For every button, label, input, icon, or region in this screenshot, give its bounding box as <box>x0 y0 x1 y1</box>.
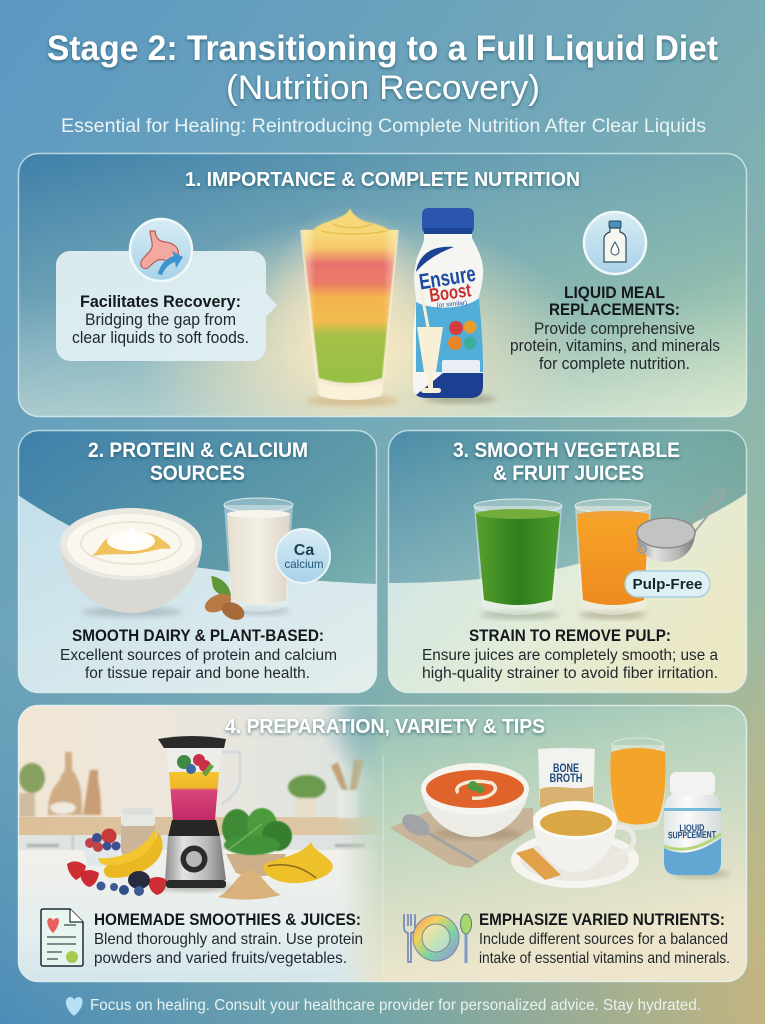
title: Stage 2: Transitioning to a Full Liquid Diet <box>47 29 718 68</box>
smooth dairy text <box>60 627 337 682</box>
subtitle: Essential for Healing: Reintroducing Complete Nutrition After Clear Liquids <box>61 116 706 137</box>
panel 3 heading: & FRUIT JUICES <box>493 462 644 485</box>
strain text: STRAIN TO REMOVE PULP: <box>469 627 671 645</box>
callout: facilitates recovery: Bridging the gap from <box>85 311 236 329</box>
bone broth packet <box>538 748 595 807</box>
liquid meal replacements text: Provide comprehensive <box>534 320 695 338</box>
panel 3: smooth vegetable and fruit juices <box>388 430 747 693</box>
panel 1 heading: 1. IMPORTANCE & COMPLETE NUTRITION <box>185 168 580 191</box>
teacup and saucer <box>511 801 639 888</box>
almonds and leaf <box>202 576 247 623</box>
layered smoothie glass <box>300 208 399 406</box>
smoothies text <box>94 910 363 967</box>
nutrients text <box>479 910 730 967</box>
footer note: Focus on healing. Consult your healthcare provider for personalized advice. Stay hydrated. <box>90 997 701 1014</box>
strawberries and blueberries <box>67 861 167 896</box>
strain text: Ensure juices are completely smooth; use a <box>422 647 718 664</box>
orange juice glass <box>575 499 651 619</box>
jar of protein drink <box>121 808 155 856</box>
napkin and spoon <box>390 808 533 868</box>
smooth dairy text: Excellent sources of protein and calcium <box>60 647 337 664</box>
nutrients text: EMPHASIZE VARIED NUTRIENTS: <box>479 910 725 929</box>
liquid meal replacements text: REPLACEMENTS: <box>549 300 680 319</box>
bananas <box>98 830 163 878</box>
icon: supplement bottle <box>584 212 646 274</box>
icon: heart <box>66 997 83 1016</box>
product label text: Ensure <box>417 261 477 294</box>
banana pieces <box>263 842 333 883</box>
callout: facilitates recovery: clear liquids to soft foods. <box>72 329 249 347</box>
callout: facilitates recovery: Facilitates Recovery: <box>80 292 241 311</box>
panel 2 heading <box>88 439 308 485</box>
title: (Nutrition Recovery) <box>226 69 540 107</box>
blender <box>158 736 240 891</box>
divider <box>382 755 384 975</box>
strain text: high-quality strainer to avoid fiber irritation. <box>422 665 718 682</box>
spinach bowl <box>222 808 292 876</box>
pulp-free pill: Pulp-Free <box>632 576 702 593</box>
nutrients text: intake of essential vitamins and minerals. <box>479 950 730 967</box>
bone broth packet: BROTH <box>550 771 582 785</box>
icon: stomach <box>130 219 192 281</box>
strainer <box>637 490 724 562</box>
bone broth packet: BONE <box>553 761 579 775</box>
smoothies text: HOMEMADE SMOOTHIES & JUICES: <box>94 910 361 929</box>
calcium badge: calcium <box>284 557 324 571</box>
product label text <box>417 261 477 309</box>
protein powder mound <box>218 870 281 900</box>
icon: health document <box>41 909 83 966</box>
panel 4 heading: 4. PREPARATION, VARIETY & TIPS <box>225 715 545 738</box>
green juice glass <box>474 499 562 619</box>
icon: rainbow plate and cutlery <box>404 914 472 963</box>
panel 3 heading: 3. SMOOTH VEGETABLE <box>453 439 680 462</box>
strain text <box>422 627 718 682</box>
product label text: (or similar) <box>436 300 467 309</box>
liquid meal replacements text: for complete nutrition. <box>539 355 690 373</box>
panel 4: preparation, variety and tips <box>18 704 748 982</box>
callout: facilitates recovery <box>56 251 277 361</box>
kitchen backdrop <box>18 705 376 982</box>
yogurt bowl <box>60 508 202 617</box>
nutrients text: Include different sources for a balanced <box>479 931 728 948</box>
smoothies text: Blend thoroughly and strain. Use protein <box>94 931 363 948</box>
liquid supplement bottle: SUPPLEMENT <box>668 830 716 841</box>
smooth dairy text: for tissue repair and bone health. <box>85 665 310 682</box>
product label text: Boost <box>428 280 473 307</box>
liquid supplement bottle <box>664 772 730 878</box>
ensure boost bottle <box>413 208 496 403</box>
liquid meal replacements text: protein, vitamins, and minerals <box>510 337 720 355</box>
liquid meal replacements text: LIQUID MEAL <box>564 283 665 302</box>
panel 1: importance and complete nutrition <box>18 152 748 418</box>
juice glass <box>610 738 666 830</box>
calcium badge: Ca <box>294 542 314 559</box>
pulp-free pill <box>625 571 710 597</box>
smooth dairy text: SMOOTH DAIRY & PLANT-BASED: <box>72 627 324 645</box>
panel 2: protein and calcium sources <box>18 430 377 693</box>
panel 2 heading: 2. PROTEIN & CALCIUM <box>88 439 308 462</box>
panel 2 heading: SOURCES <box>150 462 245 485</box>
smoothies text: powders and varied fruits/vegetables. <box>94 950 347 967</box>
liquid meal replacements text <box>510 283 720 373</box>
bowl of berries <box>83 828 120 866</box>
tomato soup bowl <box>421 763 529 839</box>
calcium badge <box>276 529 330 583</box>
liquid supplement bottle: LIQUID <box>679 823 705 834</box>
milk glass <box>224 498 293 615</box>
title <box>47 29 718 107</box>
panel 3 heading <box>453 439 680 485</box>
